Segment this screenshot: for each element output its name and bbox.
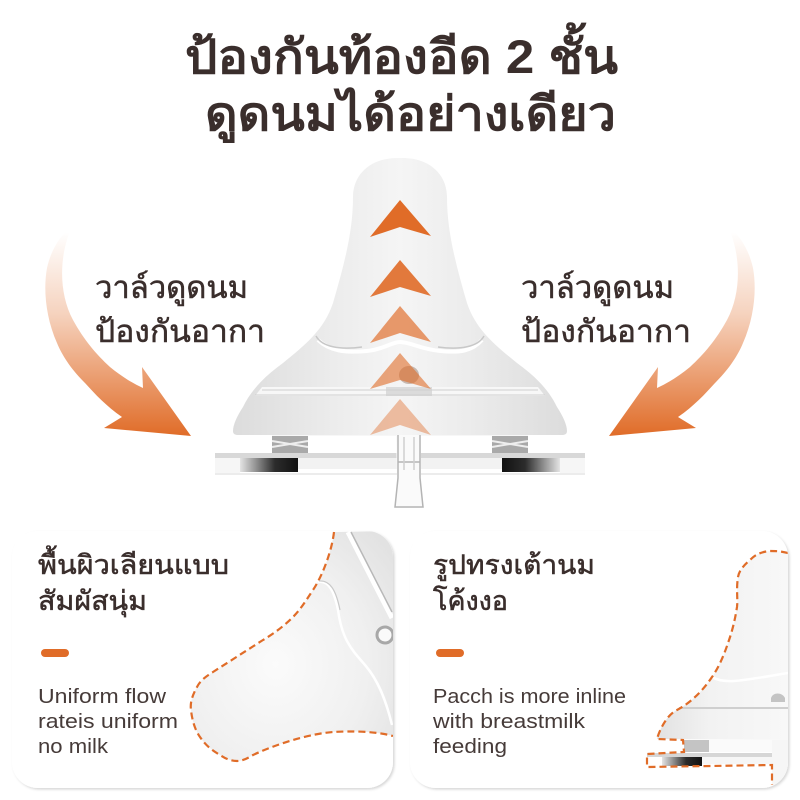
- heading: โค้งงอ: [433, 586, 508, 616]
- nipple illustration: [215, 158, 585, 507]
- nipple base ring: [215, 435, 585, 475]
- arrow: right curved arrow: [609, 225, 755, 436]
- title: [185, 22, 618, 144]
- label: right valve text: วาล์วดูดนม: [521, 270, 674, 306]
- nipple body: [233, 158, 567, 435]
- label: right valve text: ป้องกันอากา: [521, 314, 691, 349]
- label: right valve text: [521, 270, 691, 349]
- upward chevrons: [370, 200, 431, 435]
- accent bar: [41, 649, 69, 657]
- panel: curved breast shape: [410, 531, 788, 788]
- body text: Pacch is more inline: [433, 686, 626, 708]
- nipple close-up with dashed outline: [191, 531, 393, 761]
- body text: with breastmilk: [432, 711, 586, 733]
- half nipple with dashed outline: [647, 551, 788, 785]
- collar wave line: [318, 340, 482, 352]
- valve hole: [399, 366, 419, 384]
- heading: [433, 550, 595, 616]
- body text: Uniform flow: [38, 686, 167, 708]
- arrow: left curved arrow: [45, 225, 191, 436]
- title: ดูดนมได้อย่างเดียว: [205, 86, 616, 144]
- body text: [432, 686, 626, 758]
- label: left valve text: ป้องกันอากา: [95, 314, 265, 349]
- body text: feeding: [433, 736, 507, 758]
- accent bar: [436, 649, 464, 657]
- body text: [38, 686, 178, 758]
- heading: รูปทรงเต้านม: [433, 550, 595, 581]
- label: left valve text: วาล์วดูดนม: [95, 270, 248, 306]
- title: ป้องกันท้องอีด 2 ชั้น: [185, 22, 618, 83]
- heading: สัมผัสนุ่ม: [38, 586, 147, 618]
- label: left valve text: [95, 270, 265, 349]
- heading: พื้นผิวเลียนแบบ: [38, 545, 229, 580]
- panel: soft surface: [12, 531, 393, 788]
- flange band: [255, 387, 545, 396]
- body text: rateis uniform: [38, 711, 178, 733]
- heading: [38, 545, 229, 618]
- body text: no milk: [38, 736, 109, 758]
- nipple stem: [395, 435, 423, 507]
